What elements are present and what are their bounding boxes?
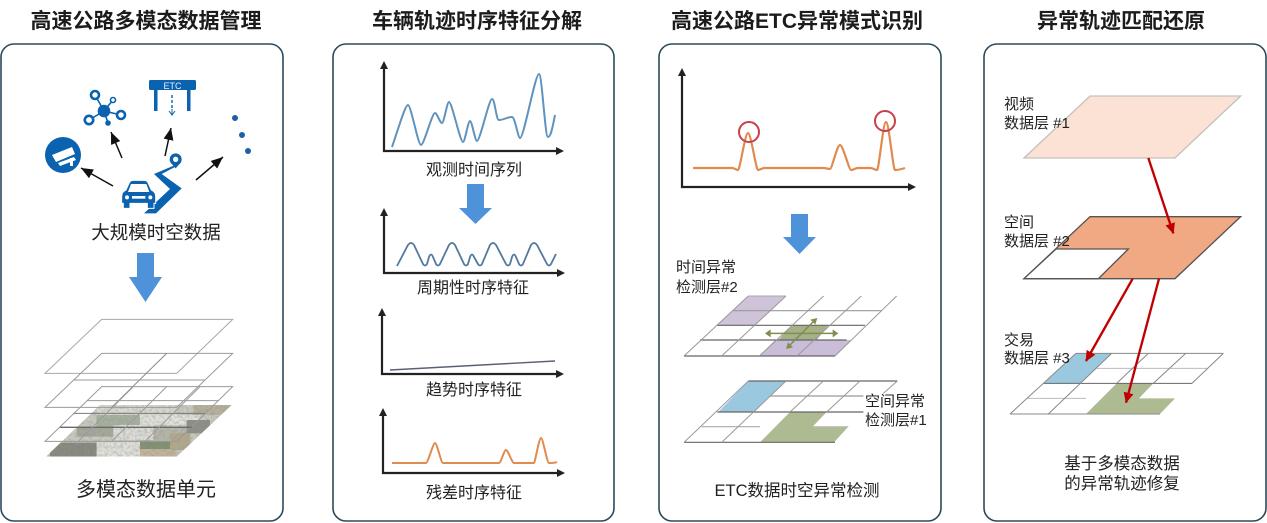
chart: periodic feature xyxy=(380,208,565,277)
chart: anomaly peaks xyxy=(678,68,916,191)
label: video layer: 视频 xyxy=(1004,96,1034,113)
label: repair: 基于多模态数据 xyxy=(1064,455,1180,473)
label: large-scale data: 大规模时空数据 xyxy=(91,222,221,243)
label: temporal anomaly layer: 时间异常 xyxy=(676,259,736,276)
label: ETC detection: ETC数据时空异常检测 xyxy=(714,481,880,500)
label: spatial anomaly layer: 空间异常 xyxy=(865,393,925,410)
video layer xyxy=(1024,96,1241,158)
wireframe layers xyxy=(45,319,233,441)
label: residual feature: 残差时序特征 xyxy=(426,484,522,502)
chart: trend feature xyxy=(378,308,564,378)
panel: ETC anomaly recognition xyxy=(659,44,941,521)
grid: spatial anomaly layer xyxy=(684,381,897,442)
label: data unit: 多模态数据单元 xyxy=(76,478,216,501)
label: transaction layer: 数据层 #3 xyxy=(1004,350,1070,367)
layered data stack xyxy=(43,319,233,458)
icon: ETC gantry: ETC xyxy=(164,81,182,91)
anomaly cells xyxy=(718,381,848,442)
anomaly cells xyxy=(717,296,852,356)
grid: temporal anomaly layer xyxy=(684,296,897,356)
arrow: down xyxy=(129,253,162,302)
arrows from vehicle xyxy=(81,128,223,186)
icon: network xyxy=(85,91,125,125)
icon: camera xyxy=(45,137,81,173)
transaction layer xyxy=(1010,353,1223,414)
label: video layer: 数据层 #1 xyxy=(1004,115,1070,132)
red matching arrows xyxy=(1086,158,1173,403)
label: spatial anomaly layer: 检测层#1 xyxy=(865,412,927,429)
label: transaction layer: 交易 xyxy=(1004,332,1034,349)
label: spatial layer: 空间 xyxy=(1004,214,1034,231)
label: trend feature: 趋势时序特征 xyxy=(426,381,522,399)
title: trajectory decomposition: 车辆轨迹时序特征分解 xyxy=(372,10,582,33)
panel frame xyxy=(659,44,941,521)
label: repair: 的异常轨迹修复 xyxy=(1064,474,1180,493)
panel: multimodal data management xyxy=(1,44,283,521)
icon: car xyxy=(122,180,156,208)
panel: trajectory decomposition xyxy=(333,44,614,521)
aerial photo layer xyxy=(43,403,233,458)
panel: trajectory restoration xyxy=(984,44,1266,521)
panel frame xyxy=(984,44,1266,521)
spread arrows xyxy=(765,318,838,349)
panel frame xyxy=(1,44,283,521)
icon: ETC gantry xyxy=(149,80,196,115)
chart: observed series xyxy=(380,61,564,155)
spatial layer xyxy=(1024,217,1241,279)
panel frame xyxy=(333,44,614,521)
icon: data dots xyxy=(232,115,251,154)
label: spatial layer: 数据层 #2 xyxy=(1004,233,1070,250)
title: multimodal data management: 高速公路多模态数据管理 xyxy=(30,9,262,33)
arrow: down xyxy=(459,184,492,224)
title: trajectory restoration: 异常轨迹匹配还原 xyxy=(1037,10,1205,33)
label: observed series: 观测时间序列 xyxy=(426,161,522,179)
label: periodic feature: 周期性时序特征 xyxy=(417,279,529,297)
arrow: down xyxy=(783,214,816,254)
layer diagram xyxy=(1010,96,1241,414)
chart: residual feature xyxy=(379,408,565,477)
label: temporal anomaly layer: 检测层#2 xyxy=(676,279,738,296)
icon: route with pin xyxy=(144,153,182,213)
title: ETC anomaly recognition: 高速公路ETC异常模式识别 xyxy=(671,9,923,33)
